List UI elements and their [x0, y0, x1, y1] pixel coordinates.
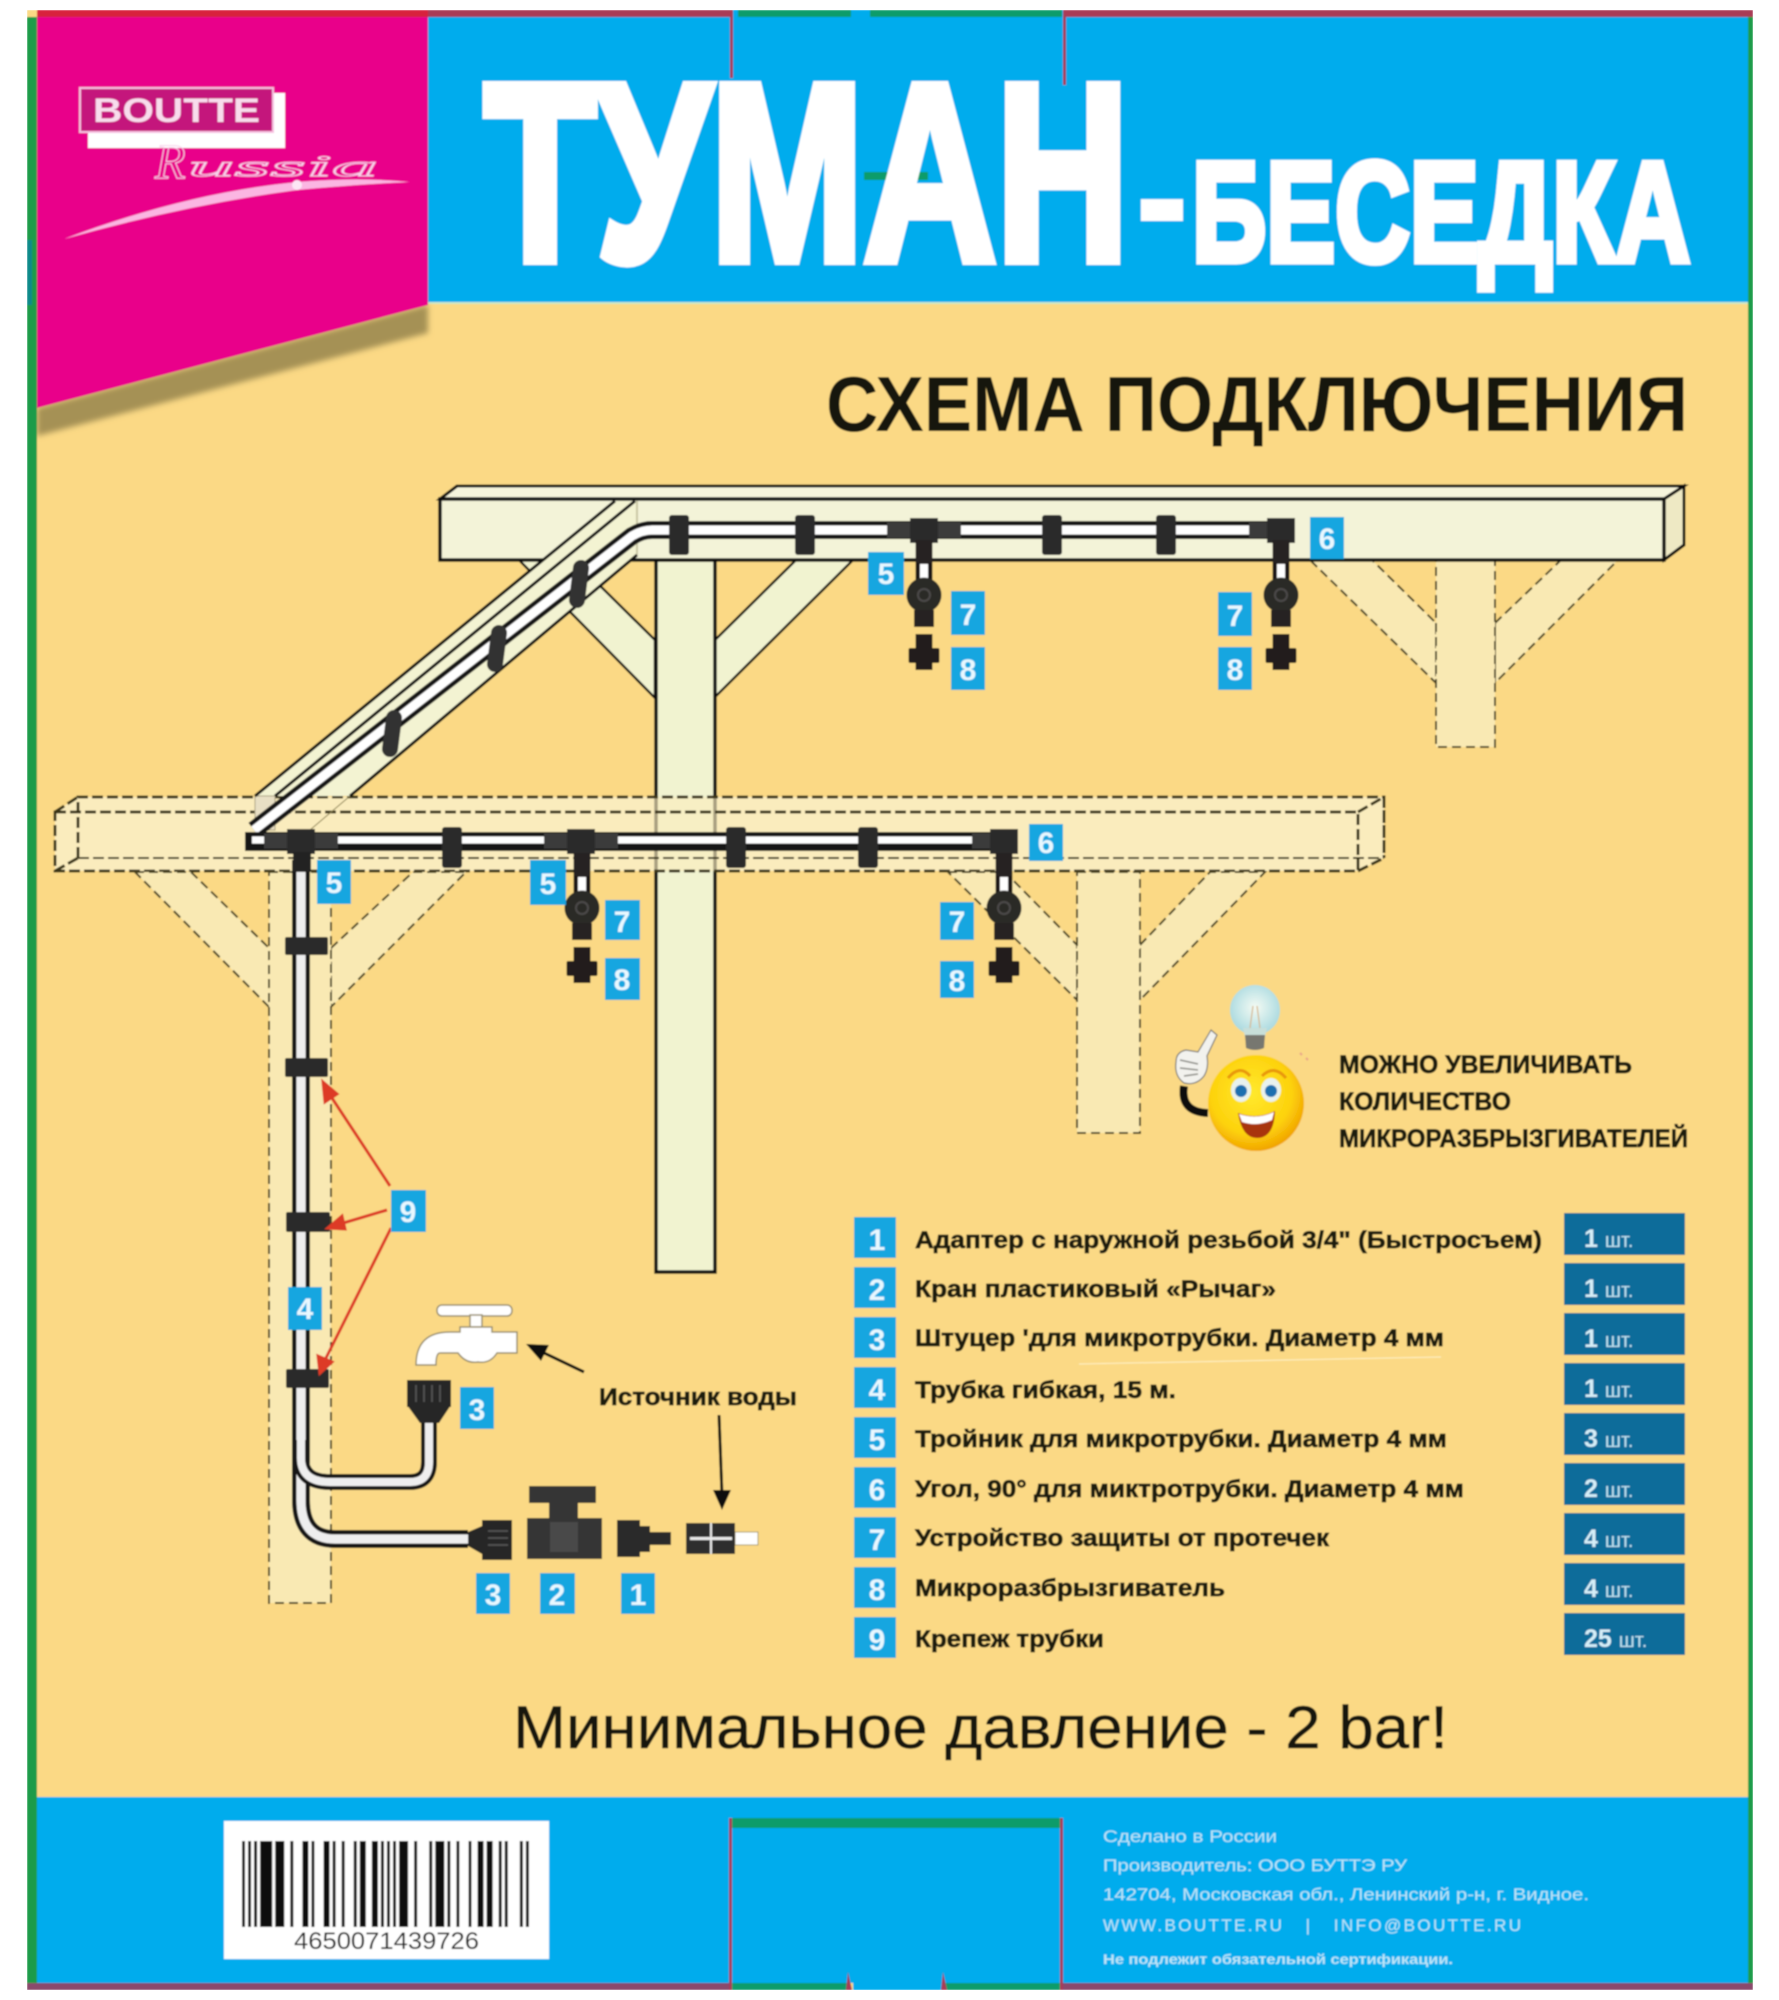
- row 9: [854, 1613, 1685, 1658]
- arrow: to tap: [526, 1344, 584, 1372]
- panel: blue header: [428, 10, 1753, 304]
- text: can increase number of sprinklers: КОЛИЧЕСТВО: [1339, 1088, 1511, 1116]
- row 1: Адаптер с наружной резьбой 3/4" (Быстросъем): [915, 1227, 1542, 1254]
- badge 3: 3: [485, 1579, 501, 1612]
- fittings: leak protection and micro sprinklers: [564, 540, 1298, 983]
- panel: blue footer: [27, 1797, 1753, 1990]
- text: manufacturer details: [1103, 1827, 1589, 1967]
- badge 7: [605, 900, 640, 940]
- row 9: Крепеж трубки: [915, 1626, 1104, 1653]
- badge 5: [317, 860, 351, 904]
- badge 5: 5: [540, 868, 556, 901]
- badge 9: [391, 1190, 426, 1232]
- text: manufacturer details: Не подлежит обязательной сертификации.: [1103, 1951, 1453, 1967]
- badge 3: [476, 1573, 510, 1614]
- row 2: 2: [869, 1274, 885, 1307]
- clips: tube fasteners: [285, 515, 1176, 1388]
- row 5: [854, 1413, 1685, 1458]
- row 6: 2 шт.: [1584, 1475, 1633, 1503]
- title: -: [1137, 113, 1187, 281]
- badge 1: [621, 1573, 655, 1614]
- badge 2: [540, 1573, 575, 1614]
- row 1: 1 шт.: [1584, 1225, 1633, 1253]
- badge 8: 8: [960, 654, 976, 687]
- row 3: 3: [869, 1324, 885, 1357]
- row 7: 7: [869, 1524, 885, 1557]
- badge 6: [1310, 517, 1344, 559]
- badge 6: [1029, 824, 1063, 861]
- badge 8: 8: [949, 965, 965, 998]
- lower beam dashed outlines: [55, 797, 1384, 871]
- panel: parts list: [854, 1213, 1685, 1658]
- badge 7: 7: [1227, 600, 1243, 633]
- badge 7: [951, 591, 985, 635]
- text: manufacturer details: 142704, Московская обл., Ленинский р-н, г. Видное.: [1103, 1885, 1589, 1904]
- badge 6: 6: [1038, 827, 1054, 860]
- diagram: diagonal beam: [255, 501, 637, 830]
- water source connector: [686, 1523, 758, 1554]
- dashed lower right post and braces: [948, 872, 1265, 1133]
- text: can increase number of sprinklers: МОЖНО УВЕЛИЧИВАТЬ: [1339, 1051, 1632, 1079]
- badge 9: 9: [400, 1196, 416, 1229]
- badge 6: 6: [1319, 523, 1335, 556]
- badge 2: 2: [549, 1579, 565, 1612]
- badge 8: [951, 647, 985, 690]
- logo: BOUTTE: BOUTTE: [93, 92, 260, 130]
- row 7: 4 шт.: [1584, 1525, 1633, 1553]
- badge 3: [460, 1387, 494, 1429]
- badge 7: 7: [960, 599, 976, 632]
- lower dashed beam fill: [55, 797, 1384, 871]
- text: can increase number of sprinklers: МИКРОРАЗБРЫЗГИВАТЕЛЕЙ: [1339, 1123, 1688, 1153]
- row 8: [854, 1563, 1685, 1608]
- row 2: Кран пластиковый «Рычаг»: [915, 1276, 1276, 1303]
- text: can increase number of sprinklers: [1339, 1051, 1688, 1153]
- badge 4: [288, 1287, 322, 1330]
- row 4: Трубка гибкая, 15 м.: [915, 1377, 1176, 1404]
- row 8: 8: [869, 1574, 885, 1607]
- panel: pink logo corner: [37, 10, 428, 436]
- row 6: 6: [869, 1474, 885, 1507]
- fittings: tees and elbows: [264, 518, 1295, 872]
- text: water source: Источник воды: [599, 1384, 797, 1411]
- dashed right post and braces, top beam: [1310, 560, 1618, 747]
- row 6: Угол, 90° для миктротрубки. Диаметр 4 мм: [915, 1476, 1464, 1503]
- diagram: top solid beam: [440, 486, 1684, 560]
- badge 5: [530, 860, 566, 905]
- row 8: 4 шт.: [1584, 1575, 1633, 1603]
- row 5: Тройник для микротрубки. Диаметр 4 мм: [915, 1426, 1447, 1453]
- text: manufacturer details: WWW.BOUTTE.RU | INFO@BOUTTE.RU: [1103, 1916, 1521, 1935]
- heading: connection scheme: СХЕМА ПОДКЛЮЧЕНИЯ: [826, 360, 1688, 448]
- title: ТУМАН: [484, 31, 1129, 314]
- row 9: 9: [869, 1624, 885, 1657]
- icon: water tap: [416, 1305, 517, 1365]
- logo: BOUTTE: R: [154, 133, 186, 189]
- badge 8: [1218, 647, 1252, 690]
- badge 5: 5: [326, 867, 342, 900]
- row 2: [854, 1263, 1685, 1308]
- row 8: Микроразбрызгиватель: [915, 1575, 1225, 1602]
- row 4: 1 шт.: [1584, 1375, 1633, 1403]
- row 7: Устройство защиты от протечек: [915, 1525, 1330, 1552]
- badge 8: [605, 958, 640, 1000]
- diagram: lower dashed beam and back structure: [55, 560, 1618, 1603]
- row 1: 1: [869, 1224, 885, 1257]
- row 2: 1 шт.: [1584, 1275, 1633, 1303]
- text: minimum pressure: Минимальное давление - 2 bar!: [513, 1694, 1448, 1761]
- badge 7: 7: [614, 906, 630, 939]
- badge 4: 4: [297, 1293, 314, 1326]
- row 6: [854, 1463, 1685, 1508]
- row 5: 3 шт.: [1584, 1425, 1633, 1453]
- dashed left post and braces: [135, 872, 466, 1603]
- icon: hand: [1176, 1030, 1217, 1084]
- badge 8: 8: [614, 964, 630, 997]
- row 4: [854, 1363, 1685, 1408]
- row 9: 25 шт.: [1584, 1625, 1647, 1653]
- pipe: lower run, vertical and branches: [245, 840, 1000, 1539]
- badge 1: 1: [630, 1579, 646, 1612]
- row 3: 1 шт.: [1584, 1325, 1633, 1353]
- badges: diagram numbers: [288, 517, 1344, 1614]
- icon: light bulb: [1230, 985, 1280, 1050]
- badge 7: [940, 902, 974, 940]
- arrows: badge 9 to clips: [318, 1082, 391, 1373]
- text: manufacturer details: Производитель: ООО БУТТЭ РУ: [1103, 1856, 1407, 1875]
- fitting: threaded adapter: [617, 1520, 671, 1557]
- row 3: Штуцер 'для микротрубки. Диаметр 4 мм: [915, 1325, 1444, 1352]
- badge 5: 5: [878, 558, 894, 591]
- fitting: upper connector 3: [407, 1380, 451, 1423]
- row 1: [854, 1213, 1685, 1258]
- logo: BOUTTE: ussia: [188, 150, 378, 183]
- row 3: [854, 1313, 1685, 1358]
- fitting: lower connector 3: [468, 1520, 512, 1560]
- icon: smiley with bulb and pointing hand: [1176, 985, 1308, 1151]
- badge 3: 3: [469, 1394, 485, 1427]
- badge 8: 8: [1227, 654, 1243, 687]
- barcode: [224, 1821, 549, 1959]
- fitting: plastic lever valve: [527, 1486, 602, 1559]
- solid central post: [519, 560, 853, 1272]
- row 7: [854, 1513, 1685, 1558]
- pipe: upper run with bend and diagonal: [254, 530, 1270, 830]
- arrow: to connector: [713, 1415, 731, 1510]
- row 4: 4: [869, 1374, 886, 1407]
- logo: BOUTTE: [64, 88, 410, 239]
- badge 8: [940, 961, 974, 998]
- row 5: 5: [869, 1424, 885, 1457]
- badge 5: [868, 552, 904, 595]
- text: manufacturer details: Сделано в России: [1103, 1827, 1277, 1846]
- badge 7: 7: [949, 906, 965, 939]
- barcode: 4650071439726: [294, 1928, 479, 1955]
- badge 7: [1218, 592, 1252, 636]
